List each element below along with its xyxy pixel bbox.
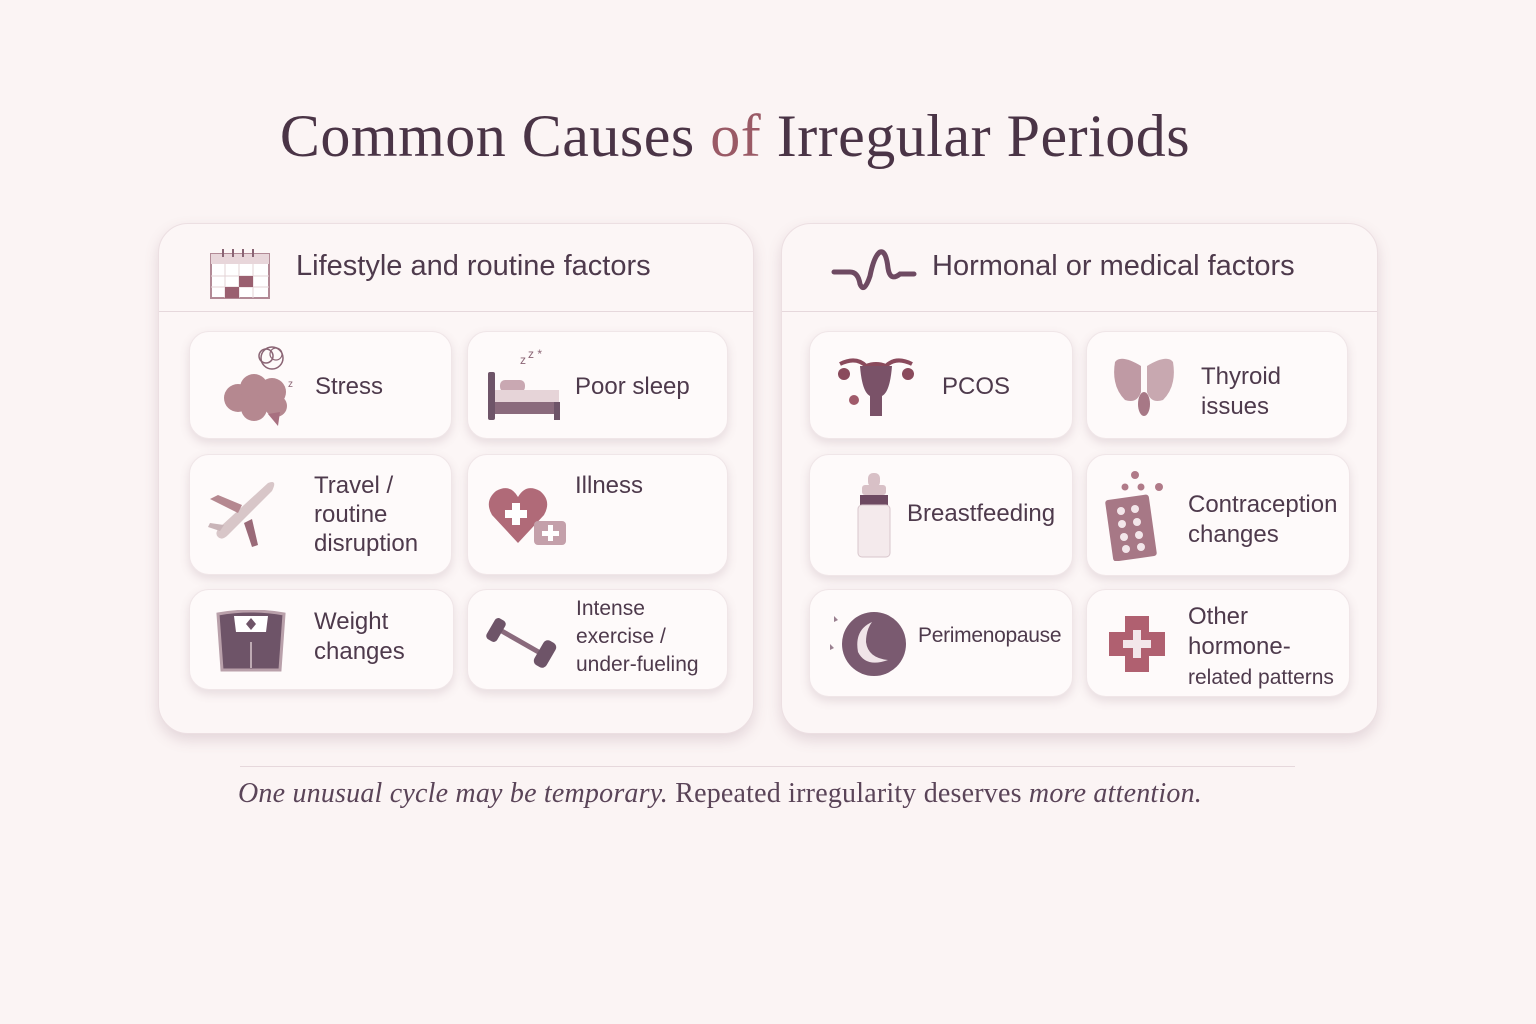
icon: bed <box>488 347 560 420</box>
card: weight <box>189 589 454 690</box>
card: exercise: exercise / <box>576 625 666 648</box>
title: Common Causes of Irregular Periods <box>280 103 1190 169</box>
icon: brain: z <box>288 379 293 390</box>
card: travel: Travel / <box>314 472 393 499</box>
icon: scale <box>216 610 286 672</box>
panel header: lifestyle: Lifestyle and routine factors <box>296 250 651 282</box>
card: travel <box>189 454 452 575</box>
card: stress <box>189 331 452 439</box>
card: perimenopause: Perimenopause <box>918 624 1061 647</box>
icon: dumbbell <box>486 618 556 668</box>
icon: heart with cross <box>488 488 566 545</box>
card: PCOS <box>809 331 1073 439</box>
icon: pill pack <box>1105 471 1163 561</box>
card: exercise: under-fueling <box>576 653 699 676</box>
card: exercise: Intense <box>576 597 645 620</box>
icon: calendar <box>210 249 270 299</box>
card: thyroid <box>1086 331 1348 439</box>
icon: wave <box>832 249 916 290</box>
card: travel: routine <box>314 501 387 528</box>
card: poor sleep <box>467 331 728 439</box>
icon: bed: z * <box>528 347 542 361</box>
card: contraception: Contraception <box>1188 491 1337 518</box>
card: illness <box>467 454 728 575</box>
card: poor sleep: Poor sleep <box>575 373 690 400</box>
card: contraception: changes <box>1188 521 1279 548</box>
icon: bed: z <box>520 353 526 367</box>
card: weight: Weight <box>314 608 388 635</box>
icon: uterus <box>838 358 914 416</box>
card: exercise <box>467 589 728 690</box>
card: travel: disruption <box>314 530 418 557</box>
card: illness: Illness <box>575 472 643 499</box>
card: weight: changes <box>314 638 405 665</box>
card: breastfeeding: Breastfeeding <box>907 500 1055 527</box>
footer note: One unusual cycle may be temporary. Repeated irregularity deserves more attention. <box>238 778 1202 809</box>
panel: hormonal <box>781 223 1378 734</box>
card: stress: Stress <box>315 373 383 400</box>
icon: moon <box>830 612 906 676</box>
card: other: Other <box>1188 603 1248 630</box>
card: other: related patterns <box>1188 666 1334 689</box>
panel: lifestyle <box>158 223 754 734</box>
card: other <box>1086 589 1350 697</box>
card: thyroid: issues <box>1201 393 1269 420</box>
divider line <box>240 766 1295 767</box>
card: other: hormone- <box>1188 633 1291 660</box>
card: breastfeeding <box>809 454 1073 576</box>
panel header: hormonal <box>782 224 1377 312</box>
panel header: lifestyle <box>159 224 753 312</box>
icon: airplane <box>208 482 274 547</box>
card: thyroid: Thyroid <box>1201 363 1281 390</box>
icon: medical cross <box>1109 616 1165 672</box>
card: PCOS: PCOS <box>942 373 1010 400</box>
icon: thyroid <box>1114 358 1174 416</box>
icon: brain <box>224 346 293 426</box>
icon: bottle <box>858 473 890 558</box>
panel header: hormonal: Hormonal or medical factors <box>932 250 1295 282</box>
card: perimenopause <box>809 589 1073 697</box>
card: contraception <box>1086 454 1350 576</box>
